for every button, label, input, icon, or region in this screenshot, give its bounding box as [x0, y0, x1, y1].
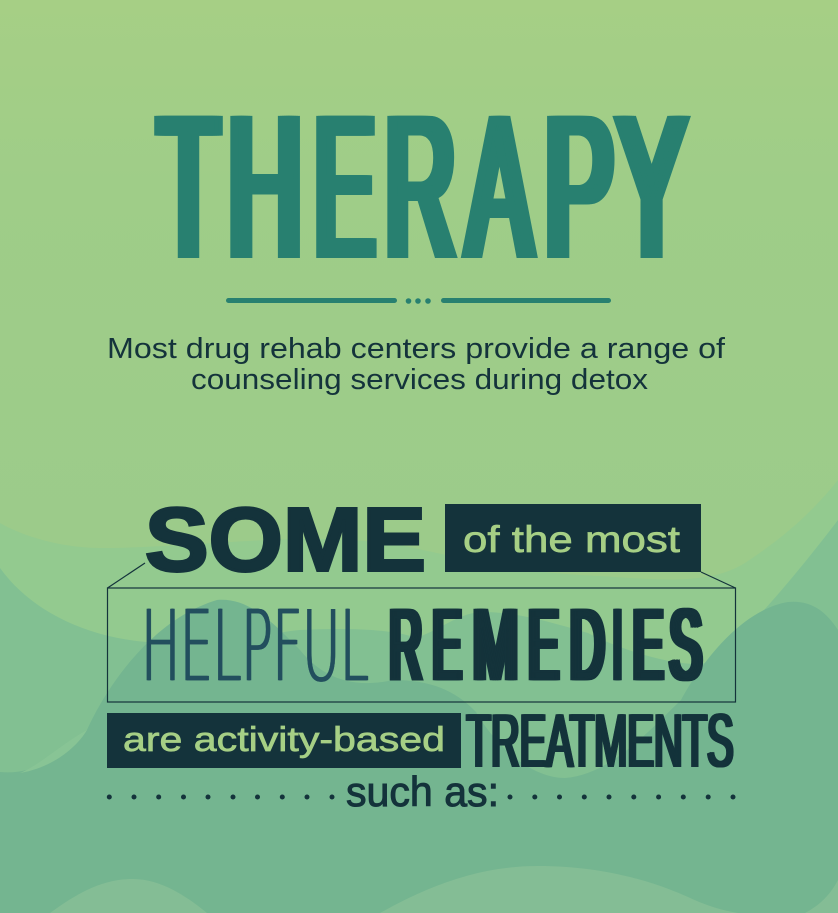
- heading word: REMEDIES: E: [630, 589, 660, 701]
- divider: [226, 298, 611, 304]
- label: of the most: [445, 504, 701, 572]
- heading word: REMEDIES: E: [430, 589, 459, 701]
- heading word: REMEDIES: R: [387, 589, 419, 701]
- title: Y: [612, 76, 681, 299]
- heading word: SOME: SOME: [145, 490, 426, 590]
- label: are activity-based: [107, 713, 461, 768]
- intro text: counseling services during detox: [191, 364, 649, 396]
- heading word: REMEDIES: E: [526, 589, 556, 701]
- frame connector lines and box: [108, 563, 736, 702]
- dotted leaders: [107, 794, 736, 800]
- label: of the most: of the most: [463, 519, 681, 560]
- infographic canvas: S: [666, 589, 698, 701]
- text: such as: such as:: [346, 768, 499, 815]
- intro text: Most drug rehab centers provide a range of: [107, 333, 726, 365]
- title: H: [223, 76, 297, 299]
- title: A: [462, 76, 527, 299]
- heading word: HELPFUL: HELPFUL: [140, 590, 368, 703]
- heading word: REMEDIES: D: [567, 589, 601, 701]
- label: are activity-based: are activity-based: [123, 721, 445, 759]
- title: T: [153, 76, 214, 299]
- heading word: REMEDIES: M: [470, 589, 514, 701]
- intro text: [107, 333, 726, 396]
- title: P: [540, 76, 608, 299]
- title: E: [310, 76, 370, 299]
- heading word: REMEDIES: I: [610, 589, 620, 701]
- title: R: [380, 76, 450, 299]
